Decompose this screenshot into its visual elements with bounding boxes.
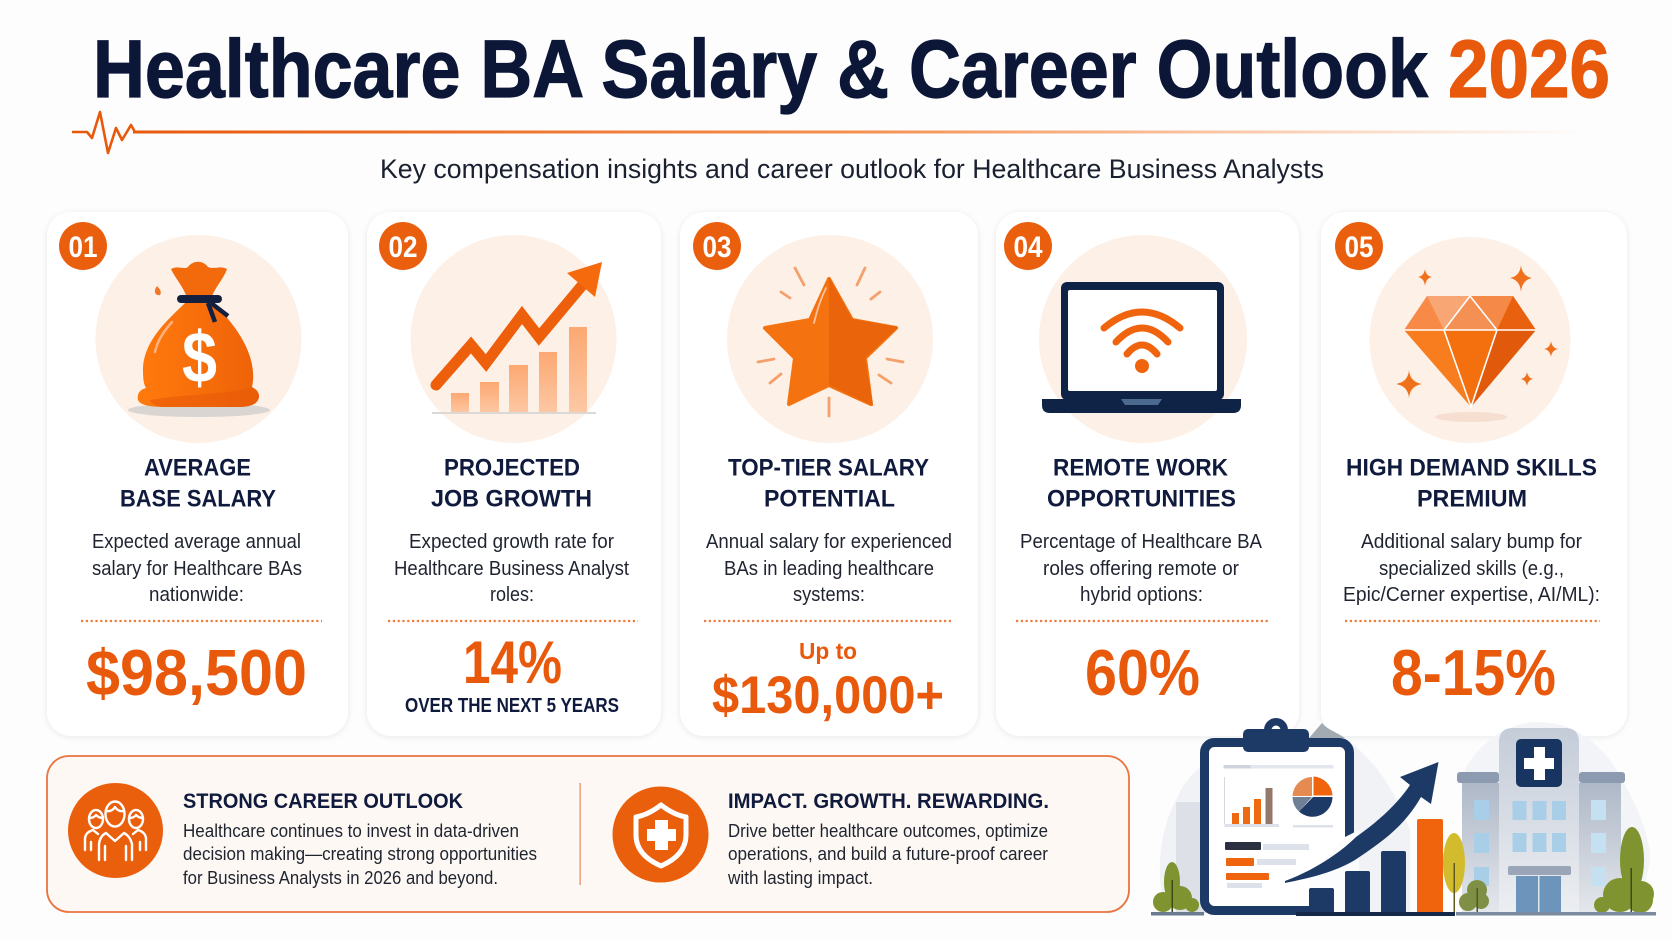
description: Percentage of Healthcare BA — [1020, 530, 1262, 553]
heading: TOP-TIER SALARY — [728, 454, 929, 482]
pie chart — [1292, 776, 1332, 817]
panel: card 3 top-tier salary potential — [680, 212, 978, 736]
heading — [1346, 454, 1597, 512]
description: roles: — [490, 583, 534, 606]
description — [1343, 530, 1600, 606]
value: 14% — [463, 629, 562, 696]
badge 01 — [59, 222, 107, 270]
description: hybrid options: — [1080, 583, 1203, 606]
description — [706, 530, 952, 606]
badge 01: 01 — [68, 231, 98, 264]
heading: OPPORTUNITIES — [1047, 486, 1236, 512]
heading: POTENTIAL — [764, 486, 895, 512]
description — [394, 530, 629, 606]
text block: strong career outlook — [183, 789, 537, 888]
illustration: clipboard, chart and hospital — [1151, 718, 1656, 919]
icon: star — [727, 235, 933, 443]
value: Up to — [799, 638, 857, 664]
description: Additional salary bump for — [1361, 530, 1582, 553]
icon: growth chart — [410, 235, 616, 443]
badge 03: 03 — [702, 231, 732, 264]
heading — [1047, 454, 1236, 512]
description: Epic/Cerner expertise, AI/ML): — [1343, 583, 1600, 606]
icon: team of people — [68, 783, 163, 878]
trees — [1153, 827, 1654, 913]
description: roles offering remote or — [1043, 557, 1239, 580]
description: BAs in leading healthcare — [724, 557, 934, 580]
badge 02: 02 — [388, 231, 418, 264]
text block: impact growth rewarding: operations, and build a future-proof career — [728, 843, 1048, 864]
arrow and bars — [1285, 762, 1443, 913]
badge 02 — [379, 222, 427, 270]
description — [92, 530, 302, 606]
heading: JOB GROWTH — [431, 486, 592, 512]
icon: diamond — [1370, 237, 1570, 443]
text block: impact growth rewarding — [727, 789, 1049, 888]
description: specialized skills (e.g., — [1379, 557, 1564, 580]
icon: shield with cross — [612, 786, 708, 882]
description: nationwide: — [149, 583, 244, 606]
value: $130,000+ — [712, 666, 944, 725]
heading: AVERAGE — [144, 454, 251, 482]
description: Annual salary for experienced — [706, 530, 952, 553]
icon: money bag — [96, 235, 302, 443]
heading — [120, 454, 276, 512]
text block: strong career outlook: STRONG CAREER OUTLOOK — [183, 789, 463, 813]
ECG heartbeat divider — [72, 112, 1585, 153]
heading: HIGH DEMAND SKILLS — [1346, 454, 1597, 482]
value — [405, 629, 619, 717]
heading — [728, 454, 929, 512]
heading: REMOTE WORK — [1053, 454, 1228, 482]
heading: PREMIUM — [1417, 486, 1527, 512]
description: salary for Healthcare BAs — [92, 557, 302, 580]
description — [1020, 530, 1262, 606]
description: Expected average annual — [92, 530, 301, 553]
panel: card 4 remote work opportunities — [996, 212, 1299, 736]
text block: strong career outlook: Healthcare continues to invest in data-driven — [183, 820, 519, 841]
panel: card 2 projected job growth — [367, 212, 661, 736]
title: Healthcare BA Salary & Career Outlook — [93, 24, 1428, 115]
title: 2026 — [1448, 24, 1610, 115]
badge 03 — [693, 222, 741, 270]
text block: strong career outlook: for Business Analysts in 2026 and beyond. — [183, 867, 498, 888]
panel: card 1 average base salary — [47, 212, 348, 736]
value: OVER THE NEXT 5 YEARS — [405, 695, 619, 717]
subtitle: Key compensation insights and career outlook for Healthcare Business Analysts — [380, 154, 1324, 184]
ground line — [1151, 912, 1656, 916]
badge 04: 04 — [1014, 231, 1043, 264]
value — [712, 638, 944, 725]
text block: impact growth rewarding: IMPACT. GROWTH. REWARDING. — [728, 789, 1049, 813]
heading: BASE SALARY — [120, 486, 276, 512]
value: 60% — [1085, 636, 1200, 709]
badge 05 — [1335, 222, 1383, 270]
panel: card 5 high demand skills premium — [1321, 212, 1627, 736]
clipboard — [1204, 718, 1359, 919]
text block: strong career outlook: decision making—creating strong opportunities — [183, 843, 537, 864]
panel: bottom callout — [47, 756, 1129, 912]
icon: money bag: $ — [182, 318, 217, 398]
badge 05: 05 — [1344, 231, 1374, 264]
heading: PROJECTED — [444, 454, 580, 482]
description: Expected growth rate for — [409, 530, 614, 553]
hospital — [1457, 728, 1625, 912]
text block: impact growth rewarding: Drive better healthcare outcomes, optimize — [728, 820, 1048, 841]
value: 8-15% — [1391, 636, 1556, 709]
description: Healthcare Business Analyst — [394, 557, 629, 580]
icon: laptop with wifi — [1039, 235, 1247, 443]
value: $98,500 — [86, 636, 307, 709]
description: systems: — [793, 583, 865, 606]
badge 04 — [1004, 222, 1052, 270]
text block: impact growth rewarding: with lasting impact. — [727, 867, 873, 888]
heading — [431, 454, 592, 512]
